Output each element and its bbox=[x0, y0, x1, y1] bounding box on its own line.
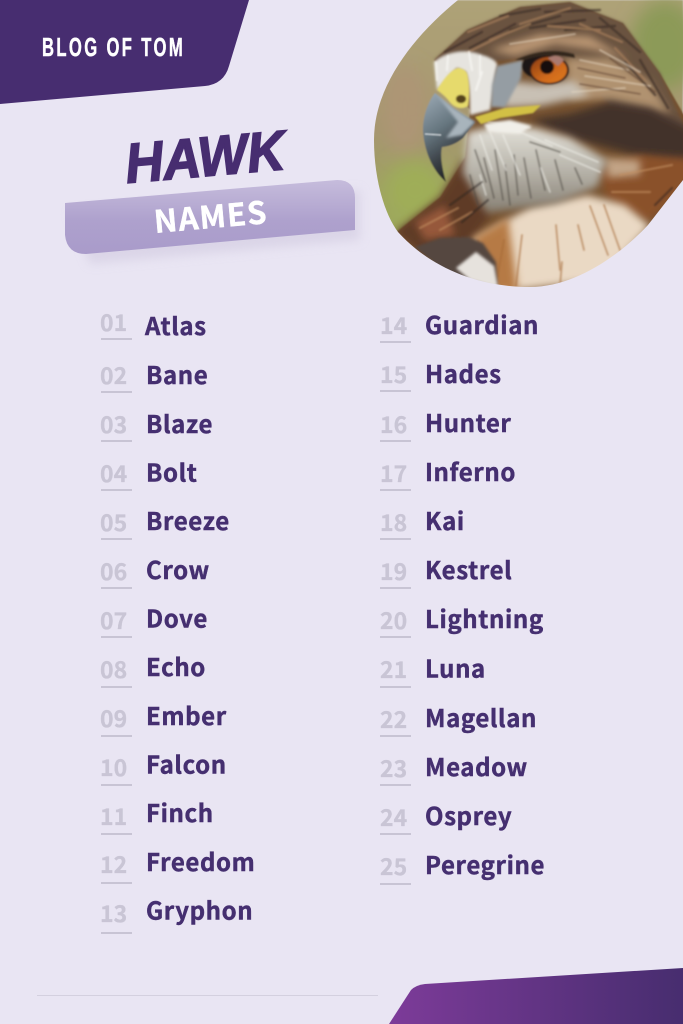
name 12: Freedom bbox=[146, 843, 255, 878]
hawk photo bbox=[370, 0, 683, 292]
throat bbox=[463, 125, 607, 213]
name 19: 19 bbox=[380, 553, 407, 587]
name 06 bbox=[100, 551, 210, 589]
hawk body bbox=[396, 2, 683, 290]
name 23 bbox=[380, 748, 528, 786]
name 21: 21 bbox=[380, 651, 407, 685]
brand banner bbox=[0, 0, 249, 104]
name 02 bbox=[100, 356, 208, 393]
name 01: 01 bbox=[100, 304, 127, 338]
name 08: 08 bbox=[100, 651, 127, 685]
name 19 bbox=[380, 551, 512, 589]
name 14 bbox=[380, 306, 539, 343]
name 13: 13 bbox=[100, 895, 127, 929]
name 23: Meadow bbox=[425, 748, 528, 783]
name 08: Echo bbox=[146, 648, 206, 683]
name 15 bbox=[380, 355, 502, 392]
neck tan highlight bbox=[605, 158, 640, 178]
title bbox=[65, 118, 360, 264]
name 22: Magellan bbox=[425, 699, 537, 734]
name 10 bbox=[100, 746, 227, 786]
name 18 bbox=[380, 502, 465, 540]
name 04: Bolt bbox=[146, 454, 197, 488]
head feathers bbox=[434, 2, 683, 130]
beak bbox=[423, 93, 475, 182]
white feather spikes bbox=[436, 52, 482, 90]
name 12: 12 bbox=[100, 846, 127, 880]
name 14: 14 bbox=[380, 307, 407, 341]
white brow patch bbox=[434, 51, 497, 115]
name 16: 16 bbox=[380, 406, 407, 440]
name 13: Gryphon bbox=[146, 892, 253, 926]
name 13 bbox=[100, 892, 253, 934]
name 09: Ember bbox=[146, 697, 227, 732]
name 25 bbox=[380, 846, 545, 885]
name 10: 10 bbox=[100, 749, 127, 783]
name 04: 04 bbox=[100, 455, 127, 489]
name 01: Atlas bbox=[144, 307, 207, 342]
brand name: BLOG OF TOM bbox=[42, 32, 185, 62]
name 11: Finch bbox=[146, 794, 214, 829]
tawny chest patch bbox=[474, 218, 518, 292]
name list: left column bbox=[100, 304, 255, 934]
name 05: Breeze bbox=[146, 502, 230, 537]
name 08 bbox=[100, 648, 206, 688]
eye bbox=[515, 51, 575, 84]
name 22: 22 bbox=[380, 701, 407, 735]
yellow cere bbox=[437, 68, 469, 108]
name 21: Luna bbox=[425, 650, 486, 684]
name 16 bbox=[380, 404, 512, 442]
feather streaks bbox=[420, 8, 672, 286]
name 06: Crow bbox=[146, 551, 210, 586]
name 03: 03 bbox=[100, 406, 127, 440]
face below eye bbox=[503, 80, 590, 108]
name 15: Hades bbox=[425, 355, 502, 390]
name 03 bbox=[100, 405, 213, 442]
subtitle word: names: NAMES bbox=[152, 187, 269, 242]
name 20: 20 bbox=[380, 602, 407, 636]
name 17: 17 bbox=[380, 455, 407, 489]
footer accent shape bbox=[389, 968, 683, 1024]
name 01 bbox=[100, 304, 207, 342]
name 22 bbox=[380, 699, 537, 737]
nostril bbox=[456, 95, 466, 103]
name 21 bbox=[380, 650, 486, 688]
name 16: Hunter bbox=[425, 404, 512, 439]
dark cheek band bbox=[530, 102, 683, 168]
photo backdrop bbox=[374, 0, 683, 232]
name 19: Kestrel bbox=[425, 551, 512, 586]
face behind eye bbox=[565, 58, 670, 115]
tan brow band bbox=[490, 34, 628, 60]
rust neck bbox=[600, 155, 683, 222]
name 20 bbox=[380, 600, 544, 638]
orange shoulder tint bbox=[415, 205, 455, 240]
name 24: Osprey bbox=[425, 797, 512, 832]
name 18: 18 bbox=[380, 504, 407, 538]
beak highlight bbox=[425, 134, 441, 135]
name 11 bbox=[100, 794, 214, 835]
title word: hawk: HAWK bbox=[123, 118, 291, 195]
name 04 bbox=[100, 454, 197, 491]
name 05: 05 bbox=[100, 504, 127, 538]
footer rule bbox=[37, 995, 378, 996]
name 17: Inferno bbox=[425, 453, 516, 488]
name 18: Kai bbox=[425, 502, 465, 537]
name 25: 25 bbox=[380, 848, 407, 882]
name 12 bbox=[100, 843, 255, 884]
name 07: 07 bbox=[100, 602, 127, 636]
name 14: Guardian bbox=[425, 306, 539, 341]
yellow gape line bbox=[475, 105, 541, 124]
name 11: 11 bbox=[100, 798, 127, 832]
name list: right column bbox=[380, 306, 545, 885]
name 17 bbox=[380, 453, 516, 491]
name 03: Blaze bbox=[146, 405, 213, 440]
subtitle ribbon bbox=[65, 180, 360, 264]
name 07: Dove bbox=[146, 600, 208, 634]
name 24 bbox=[380, 797, 512, 835]
name 23: 23 bbox=[380, 750, 407, 784]
name 24: 24 bbox=[380, 799, 407, 833]
name 05 bbox=[100, 502, 230, 540]
name 02: 02 bbox=[100, 357, 127, 391]
name 09: 09 bbox=[100, 700, 127, 734]
name 25: Peregrine bbox=[425, 846, 545, 881]
name 20: Lightning bbox=[425, 600, 544, 635]
name 09 bbox=[100, 697, 227, 737]
name 15: 15 bbox=[380, 356, 407, 390]
wing highlight bbox=[456, 252, 498, 288]
name 06: 06 bbox=[100, 553, 127, 587]
white under gape bbox=[484, 120, 532, 134]
name 07 bbox=[100, 600, 208, 638]
name 02: Bane bbox=[146, 356, 208, 391]
beak pale edge bbox=[436, 94, 475, 138]
dark rust shoulder bbox=[396, 157, 490, 255]
grey lores bbox=[491, 60, 523, 107]
cream chest bbox=[472, 195, 650, 292]
wing tip bbox=[415, 237, 498, 290]
name 10: Falcon bbox=[146, 746, 227, 780]
